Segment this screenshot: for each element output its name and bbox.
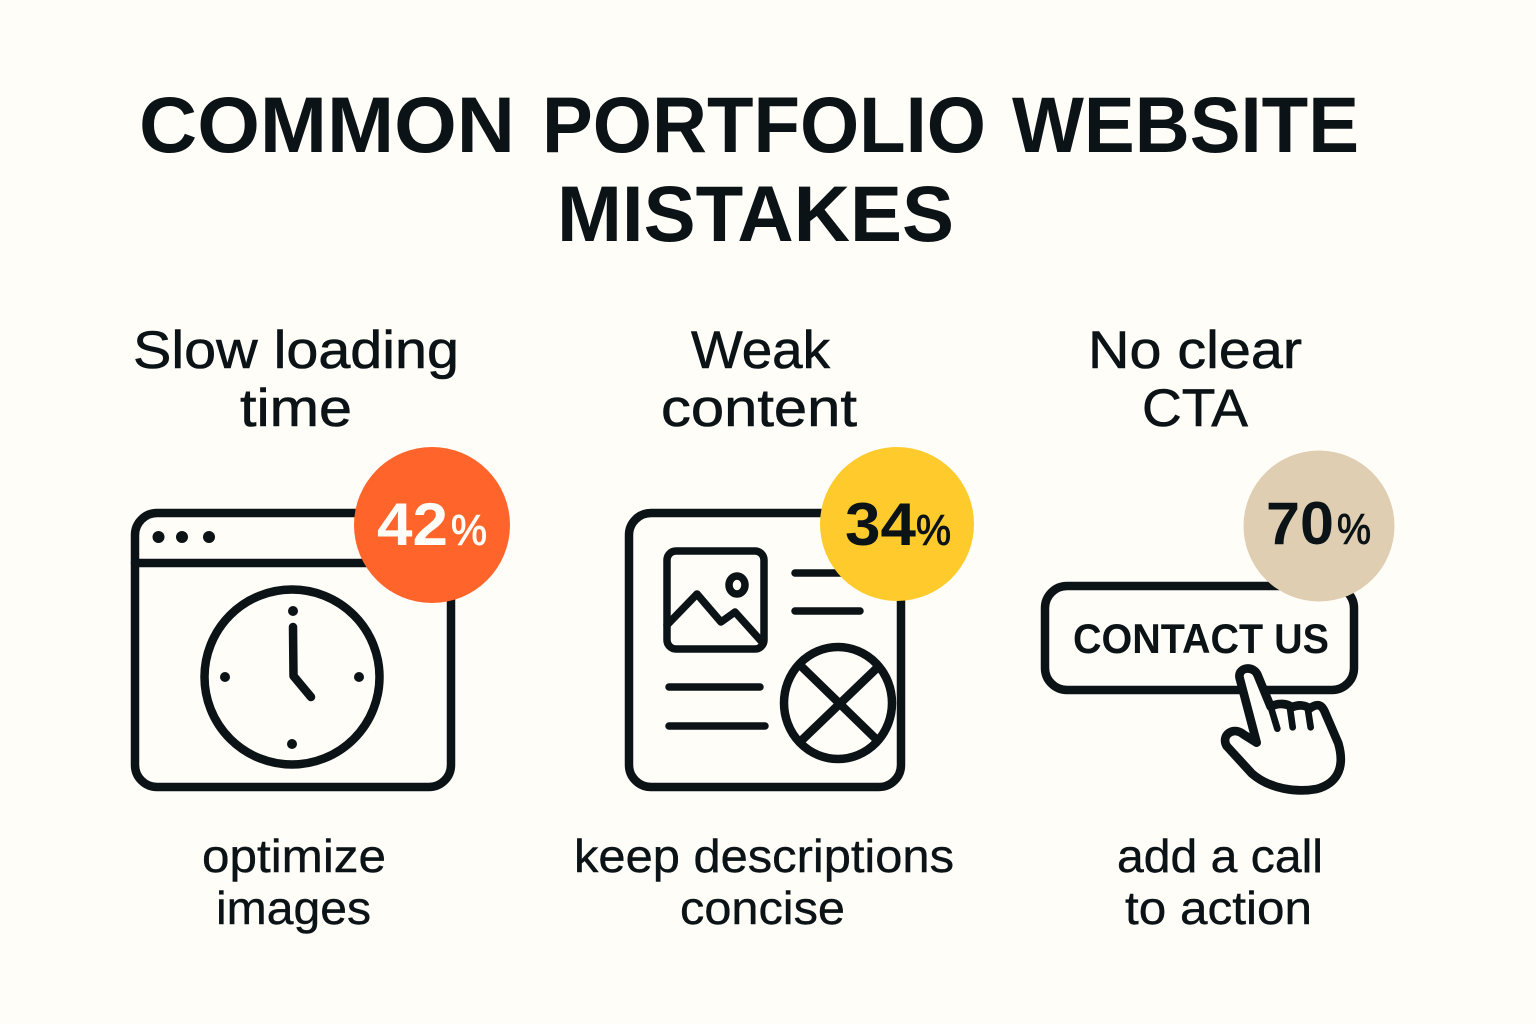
caption: add a call to action: to action — [1125, 882, 1312, 934]
heading: no clear CTA: No clear — [1088, 321, 1302, 380]
icon: contact us button with pointing hand: CONTACT US — [1073, 615, 1329, 662]
icon: contact us button with pointing hand — [1045, 586, 1354, 790]
heading: weak content: Weak — [691, 321, 831, 380]
badge: 70% — [1244, 450, 1394, 602]
heading: weak content: content — [661, 379, 857, 438]
heading: no clear CTA — [1088, 321, 1302, 438]
badge: 70%: % — [1337, 506, 1371, 554]
caption: optimize images: optimize — [202, 830, 386, 882]
caption: optimize images — [202, 830, 386, 934]
badge: 70%: 70 — [1266, 490, 1334, 557]
panel: slow loading time — [133, 321, 510, 934]
heading: weak content — [661, 321, 857, 438]
badge: 42%: 42 — [377, 491, 448, 558]
title: COMMON — [139, 80, 515, 169]
caption: keep descriptions concise: keep descriptions — [574, 830, 954, 882]
icon: browser window with clock — [135, 513, 451, 787]
caption: add a call to action — [1117, 830, 1323, 934]
badge: 42% — [354, 447, 510, 603]
badge: 34%: 34 — [845, 491, 917, 558]
badge: 34% — [820, 447, 974, 601]
caption: optimize images: images — [216, 882, 371, 934]
panel: weak content — [574, 321, 974, 934]
title: WEBSITE — [1012, 80, 1359, 169]
caption: add a call to action: add a call — [1117, 830, 1323, 882]
panel: no clear CTA — [1045, 321, 1394, 934]
title: PORTFOLIO — [542, 80, 986, 169]
heading: slow loading time — [133, 321, 459, 438]
caption: keep descriptions concise — [574, 830, 954, 934]
heading: slow loading time: time — [240, 379, 352, 438]
caption: keep descriptions concise: concise — [680, 882, 845, 934]
heading: slow loading time: Slow loading — [133, 321, 459, 380]
icon: document with image and crossed circle — [629, 513, 901, 787]
heading: no clear CTA: CTA — [1142, 379, 1249, 438]
badge: 42%: % — [451, 507, 487, 555]
title — [139, 80, 1359, 258]
title: MISTAKES — [557, 169, 954, 258]
badge: 34%: % — [916, 507, 951, 555]
